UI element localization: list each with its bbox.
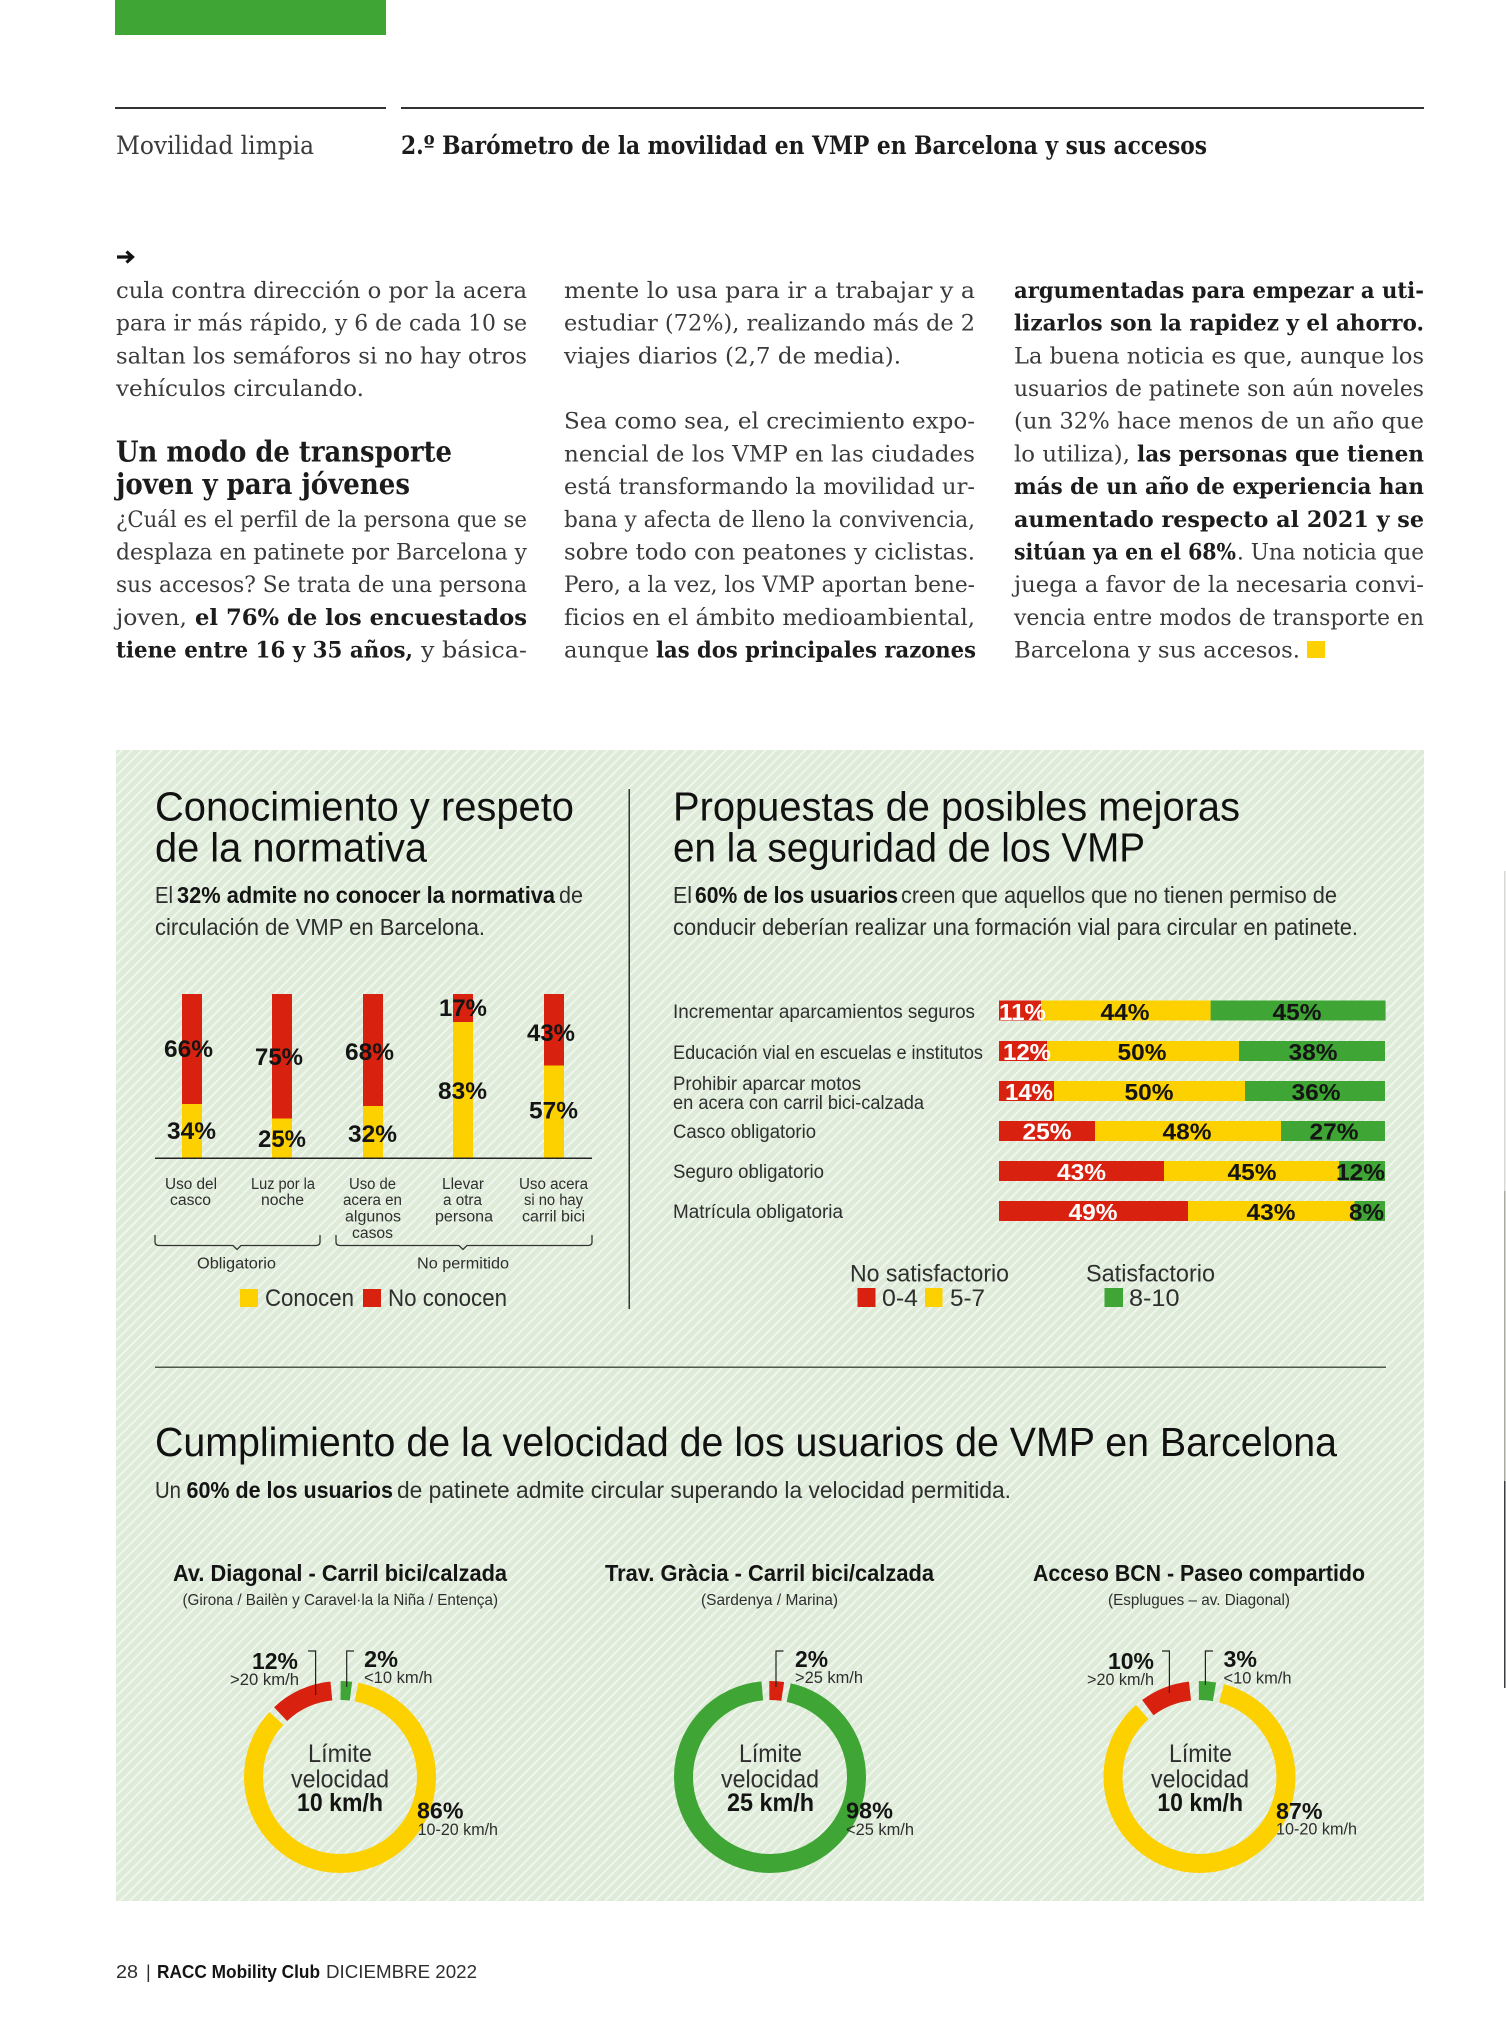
article subheading: joven y para jóvenes bbox=[113, 467, 410, 501]
panel: infographic background bbox=[116, 750, 1424, 1901]
stacked bar chart: 34% bbox=[167, 1118, 216, 1145]
heading: conocimiento: de la normativa bbox=[155, 824, 427, 870]
article column 3: Barcelona y sus accesos. bbox=[1014, 638, 1300, 664]
callout leaders: Diagonal bbox=[308, 1651, 354, 1695]
centre label: Acceso: Límite bbox=[1169, 1740, 1232, 1768]
heading: conocimiento: Conocimiento y respeto bbox=[155, 784, 574, 830]
heading: conocimiento bbox=[155, 784, 574, 870]
brace: no permitido: No permitido bbox=[417, 1256, 509, 1272]
brace: no permitido bbox=[336, 1235, 592, 1272]
stacked bar chart: 75% bbox=[255, 1044, 303, 1071]
page header: 2.º Barómetro de la movilidad en VMP en Barcelona y sus accesos bbox=[401, 131, 1207, 160]
stacked bar chart bbox=[155, 994, 592, 1159]
article column 2: viajes diarios (2,7 de media). bbox=[563, 344, 901, 369]
donut block: Av. Diagonal: (Girona / Bailèn y Caravel·la la Niña / Entença) bbox=[182, 1592, 498, 1609]
article column 1: tiene entre 16 y 35 años, bbox=[116, 638, 413, 664]
callouts: Gràcia: >25 km/h bbox=[795, 1669, 863, 1687]
footer: | bbox=[146, 1962, 151, 1982]
article column 1: y básica- bbox=[420, 638, 527, 664]
heading: cumplimiento: Cumplimiento de la velocidad de los usuarios de VMP en Barcelona bbox=[155, 1419, 1337, 1465]
article column 3: lizarlos son la rapidez y el ahorro. bbox=[1014, 311, 1424, 337]
heading: propuestas: Propuestas de posibles mejoras bbox=[673, 784, 1240, 830]
donut block: Trav. Gràcia: (Sardenya / Marina) bbox=[701, 1592, 838, 1609]
panel: cumplimiento de la velocidad bbox=[155, 1419, 1365, 1864]
callouts: Diagonal: >20 km/h bbox=[230, 1671, 299, 1689]
row labels: Matrícula obligatoria bbox=[673, 1202, 843, 1223]
article column 1: cula contra dirección o por la acera bbox=[116, 279, 527, 304]
intro text: cumplimiento: Un bbox=[155, 1477, 181, 1503]
row labels: Incrementar aparcamientos seguros bbox=[673, 1002, 975, 1023]
article column 2: sobre todo con peatones y ciclistas. bbox=[564, 540, 975, 565]
intro text: propuestas: conducir deberían realizar una formación vial para circular en patinete. bbox=[673, 914, 1358, 940]
article column 3: vencia entre modos de transporte en bbox=[1013, 606, 1424, 631]
page header: Movilidad limpia bbox=[116, 131, 314, 160]
row labels: Seguro obligatorio bbox=[673, 1162, 824, 1183]
callout leader: Gràcia bbox=[776, 1651, 784, 1687]
article column 3: más de un año de experiencia han bbox=[1014, 474, 1424, 500]
callouts: Diagonal: 10-20 km/h bbox=[418, 1821, 498, 1839]
article column 2: ficios en el ámbito medioambiental, bbox=[564, 606, 975, 631]
footer bbox=[116, 1962, 477, 1982]
article column 1: saltan los semáforos si no hay otros bbox=[116, 344, 527, 369]
horizontal stacked bars: 8% bbox=[1349, 1199, 1384, 1225]
brace: obligatorio: Obligatorio bbox=[197, 1256, 276, 1272]
intro text: cumplimiento: de patinete admite circular superando la velocidad permitida. bbox=[397, 1477, 1011, 1503]
centre label: Acceso: 10 km/h bbox=[1157, 1789, 1243, 1817]
footer: DICIEMBRE 2022 bbox=[326, 1962, 477, 1982]
donut block: Acceso BCN: Acceso BCN - Paseo compartido bbox=[1033, 1560, 1365, 1586]
bar category labels: Uso del bbox=[165, 1176, 217, 1193]
horizontal stacked bars: 27% bbox=[1310, 1119, 1358, 1145]
bar category labels: a otra bbox=[443, 1192, 482, 1209]
article column 2 bbox=[563, 279, 976, 664]
row labels: Educación vial en escuelas e institutos bbox=[673, 1043, 983, 1064]
legend: satisfaction: 5-7 bbox=[950, 1285, 985, 1312]
article column 3: usuarios de patinete son aún noveles bbox=[1014, 377, 1424, 402]
intro text: conocimiento: circulación de VMP en Barcelona. bbox=[155, 914, 485, 940]
donut block: Trav. Gràcia bbox=[605, 1560, 935, 1864]
donut chart: Gràcia bbox=[684, 1690, 856, 1864]
horizontal stacked bars: 12% bbox=[1003, 1039, 1051, 1065]
callouts: Acceso: 87% bbox=[1276, 1798, 1322, 1824]
article column 3: (un 32% hace menos de un año que bbox=[1014, 410, 1424, 435]
callouts: Acceso: 10% bbox=[1108, 1648, 1154, 1674]
horizontal stacked bars: 36% bbox=[1292, 1079, 1340, 1105]
centre label: Diagonal: 10 km/h bbox=[297, 1789, 383, 1817]
horizontal stacked bars: 48% bbox=[1162, 1119, 1212, 1145]
article subheading bbox=[113, 434, 452, 501]
article column 3: juega a favor de la necesaria convi- bbox=[1011, 573, 1424, 598]
bar category labels: Uso acera bbox=[519, 1176, 588, 1193]
callout leaders: Acceso bbox=[1162, 1651, 1213, 1693]
bar category labels: algunos bbox=[345, 1208, 401, 1226]
horizontal stacked bars: 11% bbox=[999, 999, 1046, 1025]
donut block: Av. Diagonal bbox=[173, 1560, 508, 1864]
article column 2: Pero, a la vez, los VMP aportan bene- bbox=[564, 573, 975, 598]
intro text: propuestas: creen que aquellos que no tienen permiso de bbox=[901, 882, 1337, 908]
article column 1: vehículos circulando. bbox=[115, 377, 364, 402]
callouts: Acceso bbox=[1087, 1646, 1357, 1839]
bar category labels: Llevar bbox=[442, 1176, 484, 1193]
centre label: Diagonal bbox=[291, 1740, 389, 1817]
bar category labels: Luz por la bbox=[251, 1176, 315, 1193]
horizontal stacked bars: 45% bbox=[1228, 1159, 1276, 1185]
bar category labels: casco bbox=[170, 1192, 211, 1209]
bar category labels: si no hay bbox=[524, 1192, 583, 1209]
stacked bar chart: 25% bbox=[258, 1126, 306, 1153]
panel: conocimiento y respeto de la normativa bbox=[155, 784, 592, 1312]
horizontal stacked bars: 38% bbox=[1288, 1039, 1338, 1065]
centre label: Diagonal: Límite bbox=[308, 1740, 372, 1768]
row labels: Prohibir aparcar motos bbox=[673, 1074, 861, 1095]
article column 3: las personas que tienen bbox=[1137, 441, 1424, 467]
callouts: Diagonal: 12% bbox=[252, 1648, 298, 1674]
callouts: Acceso: 3% bbox=[1224, 1646, 1257, 1672]
intro text: propuestas: 60% de los usuarios bbox=[695, 882, 898, 908]
centre label: Gràcia bbox=[721, 1740, 819, 1817]
callouts: Gràcia: 2% bbox=[795, 1646, 828, 1672]
stacked bar chart: 17% bbox=[439, 995, 487, 1022]
callouts: Diagonal: <10 km/h bbox=[364, 1669, 432, 1687]
article column 2: mente lo usa para ir a trabajar y a bbox=[564, 279, 975, 304]
article column 3: sitúan ya en el 68% bbox=[1014, 539, 1236, 565]
legend: satisfaction: Satisfactorio bbox=[1086, 1261, 1215, 1288]
article subheading: Un modo de transporte bbox=[116, 434, 452, 468]
centre label: Diagonal: velocidad bbox=[291, 1766, 389, 1794]
article column 1: el 76% de los encuestados bbox=[195, 605, 527, 631]
donut chart: Acceso bbox=[1113, 1690, 1286, 1864]
callouts: Gràcia: 98% bbox=[846, 1798, 893, 1824]
horizontal stacked bars: 43% bbox=[1057, 1159, 1106, 1185]
stacked bar chart: 32% bbox=[348, 1121, 397, 1148]
article column 3: La buena noticia es que, aunque los bbox=[1014, 344, 1424, 369]
horizontal stacked bars: 25% bbox=[1022, 1119, 1072, 1145]
article column 3: argumentadas para empezar a uti- bbox=[1014, 278, 1424, 304]
centre label: Acceso bbox=[1151, 1740, 1249, 1817]
green top tab bbox=[115, 0, 386, 35]
article column 1 bbox=[113, 279, 528, 664]
callouts: Gràcia: <25 km/h bbox=[846, 1821, 914, 1839]
legend: conocen / no conocen: Conocen bbox=[265, 1285, 354, 1312]
legend: conocen / no conocen bbox=[240, 1285, 507, 1312]
horizontal stacked bars: 50% bbox=[1118, 1039, 1166, 1065]
icon: continuation arrow bbox=[117, 252, 132, 262]
callouts: Acceso: >20 km/h bbox=[1087, 1671, 1154, 1689]
row labels bbox=[673, 1002, 983, 1223]
horizontal stacked bars: 43% bbox=[1246, 1199, 1296, 1225]
footer: 28 bbox=[116, 1962, 138, 1982]
callouts: Diagonal: 2% bbox=[364, 1646, 398, 1672]
intro text: conocimiento: de bbox=[559, 882, 583, 908]
horizontal stacked bars: 44% bbox=[1100, 999, 1150, 1025]
article column 2: estudiar (72%), realizando más de 2 bbox=[564, 312, 975, 337]
heading: propuestas: en la seguridad de los VMP bbox=[673, 824, 1145, 870]
row labels: en acera con carril bici-calzada bbox=[673, 1093, 924, 1114]
donut block: Av. Diagonal: Av. Diagonal - Carril bici/calzada bbox=[173, 1560, 508, 1586]
row labels: Casco obligatorio bbox=[673, 1122, 816, 1143]
bar category labels: Uso de bbox=[349, 1176, 396, 1193]
bar category labels: persona bbox=[435, 1208, 493, 1226]
legend: satisfaction: 0-4 bbox=[882, 1285, 918, 1312]
legend: satisfaction bbox=[850, 1261, 1215, 1312]
brace: obligatorio bbox=[155, 1235, 320, 1272]
heading: propuestas bbox=[673, 784, 1240, 870]
article column 3: lo utiliza), bbox=[1014, 442, 1130, 467]
callouts: Gràcia bbox=[795, 1646, 914, 1839]
article column 1: ¿Cuál es el perfil de la persona que se bbox=[116, 508, 527, 533]
intro text: propuestas: El bbox=[673, 882, 692, 908]
bar category labels: acera en bbox=[343, 1192, 402, 1209]
legend: satisfaction: 8-10 bbox=[1129, 1285, 1180, 1312]
article column 2: está transformando la movilidad ur- bbox=[564, 475, 975, 500]
intro text: conocimiento: El bbox=[155, 882, 173, 908]
panel: propuestas de mejoras bbox=[673, 784, 1386, 1312]
article column 1: sus accesos? Se trata de una persona bbox=[116, 573, 527, 598]
donut block: Acceso BCN: (Esplugues – av. Diagonal) bbox=[1108, 1592, 1290, 1609]
icon: end-of-article yellow square bbox=[1307, 641, 1325, 658]
callouts: Acceso: 10-20 km/h bbox=[1276, 1821, 1357, 1839]
centre label: Gràcia: velocidad bbox=[721, 1766, 819, 1794]
intro text: propuestas bbox=[673, 882, 1358, 940]
stacked bar chart: 83% bbox=[438, 1078, 487, 1105]
bar category labels: casos bbox=[352, 1225, 393, 1242]
intro text: conocimiento bbox=[155, 882, 583, 940]
article column 2: bana y afecta de lleno la convivencia, bbox=[564, 508, 975, 533]
article column 2: las dos principales razones bbox=[656, 638, 976, 664]
article column 2: nencial de los VMP en las ciudades bbox=[564, 442, 975, 467]
stacked bar chart: 66% bbox=[164, 1036, 213, 1063]
horizontal stacked bars: 12% bbox=[1336, 1159, 1385, 1185]
article column 1: para ir más rápido, y 6 de cada 10 se bbox=[116, 312, 527, 337]
article column 1: desplaza en patinete por Barcelona y bbox=[116, 540, 528, 565]
horizontal stacked bars: 45% bbox=[1272, 999, 1322, 1025]
page header bbox=[115, 107, 1424, 160]
horizontal stacked bars: 14% bbox=[1005, 1079, 1053, 1105]
legend: conocen / no conocen: No conocen bbox=[388, 1285, 507, 1312]
legend: satisfaction: No satisfactorio bbox=[850, 1261, 1009, 1288]
horizontal stacked bars: 50% bbox=[1124, 1079, 1174, 1105]
footer: RACC Mobility Club bbox=[157, 1962, 320, 1982]
callouts: Diagonal: 86% bbox=[417, 1798, 464, 1824]
article column 2: Sea como sea, el crecimiento expo- bbox=[564, 410, 975, 435]
intro text: cumplimiento: 60% de los usuarios bbox=[186, 1477, 393, 1503]
stacked bar chart: 57% bbox=[529, 1098, 578, 1124]
callouts: Diagonal bbox=[230, 1646, 498, 1839]
article column 3 bbox=[1011, 278, 1424, 664]
donut block: Trav. Gràcia: Trav. Gràcia - Carril bici/calzada bbox=[605, 1560, 935, 1586]
bar category labels bbox=[165, 1176, 588, 1242]
article column 3: . Una noticia que bbox=[1237, 540, 1424, 565]
stacked bar chart: 68% bbox=[345, 1039, 394, 1066]
centre label: Gràcia: Límite bbox=[739, 1740, 802, 1768]
centre label: Acceso: velocidad bbox=[1151, 1766, 1249, 1794]
donut block: Acceso BCN bbox=[1033, 1560, 1365, 1864]
bar category labels: noche bbox=[261, 1192, 304, 1209]
article column 3: aumentado respecto al 2021 y se bbox=[1014, 507, 1424, 533]
article column 1: joven, bbox=[113, 606, 187, 631]
horizontal stacked bars: 49% bbox=[1068, 1199, 1118, 1225]
callouts: Acceso: <10 km/h bbox=[1224, 1670, 1292, 1688]
centre label: Gràcia: 25 km/h bbox=[727, 1789, 814, 1817]
stacked bar chart: 43% bbox=[527, 1020, 575, 1047]
donut chart: Diagonal bbox=[254, 1690, 426, 1864]
horizontal stacked bars bbox=[999, 999, 1386, 1225]
intro text: conocimiento: 32% admite no conocer la normativa bbox=[177, 882, 555, 908]
article column 2: aunque bbox=[564, 638, 649, 664]
bar category labels: carril bici bbox=[522, 1208, 585, 1226]
